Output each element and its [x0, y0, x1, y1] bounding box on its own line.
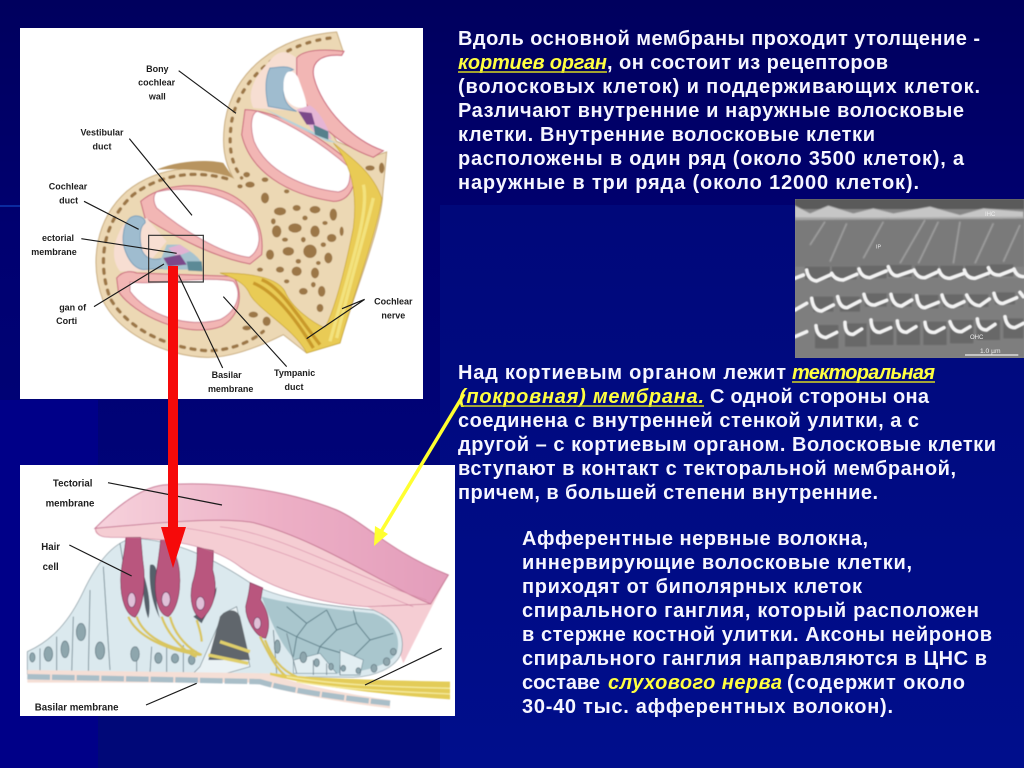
text block: afferent fibres: 30-40 тыс. афферентных волокон).	[522, 696, 893, 718]
basilar membrane	[27, 670, 390, 708]
labels: cochlea: Corti	[56, 316, 77, 326]
yellow arrow	[374, 394, 464, 546]
text block: organ of Corti: клетки. Внутренние волосковые клетки	[458, 124, 875, 146]
outer cell network	[262, 597, 398, 673]
nerve fibres to hair cells	[128, 617, 297, 677]
electron micrograph of hair cells	[795, 199, 1024, 358]
labels: cochlea: Vestibular	[81, 127, 124, 137]
labels: cochlea: cochlear	[138, 78, 176, 88]
labels: cochlea: Bony	[146, 64, 169, 74]
diagram: organ of Corti	[20, 465, 455, 716]
labels: cochlea: Cochlear	[49, 181, 88, 191]
modiolus pores	[237, 163, 384, 330]
lower turn: vestibular chamber	[141, 186, 262, 264]
text block: afferent fibres: Афферентные нервные волокна,	[522, 528, 868, 550]
dark supporting gaps	[142, 564, 217, 623]
brown shell top	[157, 161, 233, 178]
text block: afferent fibres: слухового нерва	[608, 672, 782, 694]
labels: cochlea: Basilar	[212, 370, 242, 380]
text block: tectorial membrane: С одной стороны она	[710, 386, 930, 408]
labels: cochlea: membrane	[208, 384, 253, 394]
labels: cochlea: membrane	[31, 247, 77, 257]
text block: afferent fibres: приходят от биполярных клеток	[522, 576, 863, 598]
leader lines	[69, 483, 442, 705]
text block: organ of Corti: Вдоль основной мембраны проходит утолщение -	[458, 28, 980, 50]
bone	[96, 32, 387, 357]
labels: cochlea: Tympanic	[274, 368, 315, 378]
labels: organ of Corti: Tectorial	[53, 479, 92, 490]
text block: tectorial membrane: текторальная	[792, 362, 935, 384]
tectorial lower pale sheet	[95, 517, 448, 663]
text block: afferent fibres: спирального ганглия направляются в ЦНС в	[522, 648, 987, 670]
labels: organ of Corti: cell	[43, 562, 59, 573]
text block: tectorial membrane	[458, 362, 996, 504]
upper turn: scala media + bands	[251, 52, 300, 111]
text block: organ of Corti: (волосковых клеток) и поддерживающих клеток.	[458, 76, 980, 98]
text block: afferent fibres: спирального ганглия, который расположен	[522, 600, 979, 622]
scala media left	[114, 218, 167, 271]
text block: tectorial membrane: причем, в большей степени внутренние.	[458, 482, 878, 504]
text block: afferent fibres	[522, 528, 992, 718]
labels: cochlea: duct	[285, 382, 303, 392]
tympanic chamber	[117, 272, 239, 330]
detail frame	[149, 235, 203, 282]
text block: tectorial membrane: Над кортиевым органом лежит	[458, 362, 786, 384]
epithelial cells	[40, 543, 340, 675]
text block: tectorial membrane: (покровная) мембрана.	[459, 386, 704, 408]
text block: organ of Corti: Различают внутренние и наружные волосковые	[458, 100, 964, 122]
text block: afferent fibres: составе	[522, 672, 600, 694]
text block: organ of Corti: кортиев орган	[458, 52, 607, 74]
labels: cochlea: ectorial	[42, 233, 74, 243]
tectorial upper	[95, 484, 448, 604]
labels: cochlea: Cochlear	[374, 297, 413, 307]
text block: afferent fibres: в стержне костной улитки. Аксоны нейронов	[522, 624, 992, 646]
text block: tectorial membrane: соединена с внутренней стенкой улитки, а с	[458, 410, 919, 432]
leader lines	[81, 71, 365, 368]
labels: cochlea	[31, 64, 413, 394]
labels: organ of Corti: Hair	[41, 542, 60, 553]
labels: cochlea: duct	[59, 195, 78, 205]
labels: cochlea: gan of	[59, 303, 87, 313]
text block: tectorial membrane: вступают в контакт с текторальной мембраной,	[458, 458, 956, 480]
labels: cochlea: wall	[148, 91, 166, 101]
organ body	[27, 538, 402, 677]
text block: tectorial membrane: другой – с кортиевым органом. Волосковые клетки	[458, 434, 996, 456]
labels: organ of Corti	[35, 479, 119, 714]
electron micrograph of hair cells: IP	[876, 244, 881, 250]
nerve bundle	[270, 673, 450, 699]
electron micrograph of hair cells: 1.0 µm	[980, 348, 1001, 355]
text block: afferent fibres: иннервирующие волосковые клетки,	[522, 552, 912, 574]
labels: cochlea: nerve	[381, 310, 405, 320]
diagram: cochlea cross-section	[20, 28, 423, 399]
hair cells	[121, 537, 269, 638]
labels: organ of Corti: Basilar membrane	[35, 703, 119, 714]
tunnel of Corti	[193, 607, 250, 673]
cochlear nerve	[220, 143, 382, 353]
electron micrograph of hair cells: OHC	[970, 335, 984, 341]
text block: organ of Corti	[458, 28, 980, 194]
electron micrograph of hair cells: IHC	[985, 212, 996, 218]
labels: organ of Corti: membrane	[46, 499, 95, 510]
text block: organ of Corti: , он состоит из рецепторов	[607, 52, 888, 74]
text block: organ of Corti: расположены в один ряд (около 3500 клеток), а	[458, 148, 965, 170]
wall pores	[230, 38, 330, 178]
labels: cochlea: duct	[93, 142, 111, 152]
text block: afferent fibres: (содержит около	[787, 672, 965, 694]
red arrow	[161, 266, 186, 568]
text block: organ of Corti: наружные в три ряда (около 12000 клеток).	[458, 172, 919, 194]
